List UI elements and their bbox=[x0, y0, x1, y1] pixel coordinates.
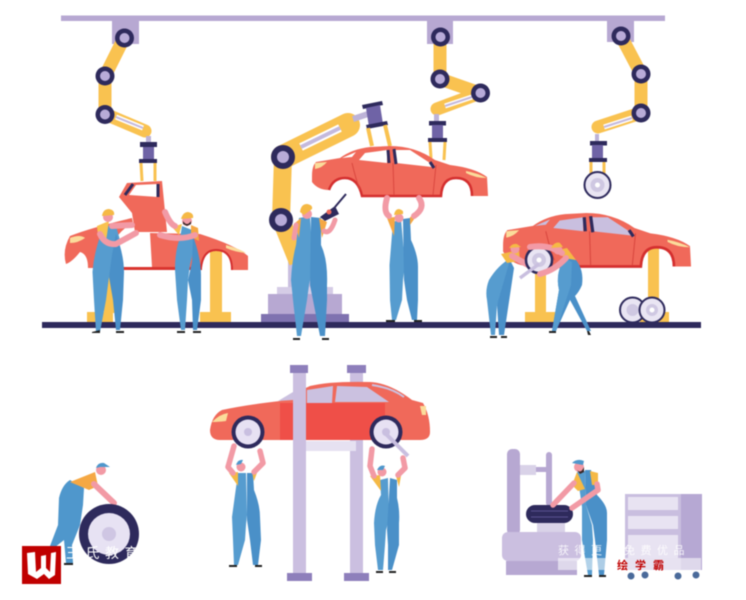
car 2 lifted bbox=[312, 146, 488, 196]
lift stands under car 3 bbox=[525, 247, 669, 322]
robot arm 1 bbox=[96, 21, 157, 181]
car 1 body with door lifted out bbox=[65, 181, 248, 270]
white watermark band bbox=[558, 558, 701, 570]
worker 5 fitting wheel bbox=[486, 244, 528, 338]
tool cabinet bbox=[625, 494, 702, 570]
lift stands under car 1 bbox=[87, 250, 231, 322]
worker 10 at tyre machine bbox=[553, 460, 607, 577]
right wheel bbox=[370, 416, 402, 448]
car 3 bbox=[503, 213, 691, 266]
bottom lift front post bbox=[287, 365, 312, 581]
watermark text left: 王氏教育 bbox=[66, 545, 144, 561]
car door held by arm 1 bbox=[119, 181, 167, 232]
tyre on machine bbox=[526, 505, 573, 523]
logo bbox=[22, 546, 61, 584]
robot arm 3 bbox=[427, 21, 490, 160]
worker 9 under car bbox=[370, 449, 405, 573]
brand text: 绘学霸 bbox=[617, 558, 671, 572]
worker 3 with tablet bbox=[291, 194, 346, 340]
tyres on floor bbox=[620, 298, 664, 322]
held tyre bbox=[584, 172, 610, 198]
factory floor bbox=[42, 322, 701, 328]
overhead rail bbox=[61, 16, 665, 21]
car 4 on lift bbox=[210, 382, 430, 456]
robot arm 4 bbox=[584, 21, 650, 198]
worker 1 bbox=[92, 209, 136, 333]
watermark text right: 获得更多免费优品 bbox=[558, 543, 690, 557]
worker 4 holding car bbox=[385, 198, 422, 322]
worker 8 under car bbox=[228, 446, 263, 567]
brand icons bbox=[628, 572, 700, 580]
tyre bbox=[79, 504, 139, 564]
robot arm 2 base steps bbox=[261, 260, 349, 322]
tyre changing machine bbox=[502, 449, 581, 575]
bottom lift rear post bbox=[306, 365, 369, 581]
robot arm 2 bbox=[269, 101, 390, 262]
tablet device bbox=[320, 194, 346, 221]
wheel being fitted bbox=[520, 247, 552, 278]
worker 6 fitting wheel bbox=[530, 243, 591, 335]
left wheel bbox=[232, 416, 264, 448]
wrench bbox=[385, 433, 408, 456]
worker 7 rolling tyre bbox=[50, 463, 139, 565]
worker 2 bbox=[160, 212, 201, 333]
